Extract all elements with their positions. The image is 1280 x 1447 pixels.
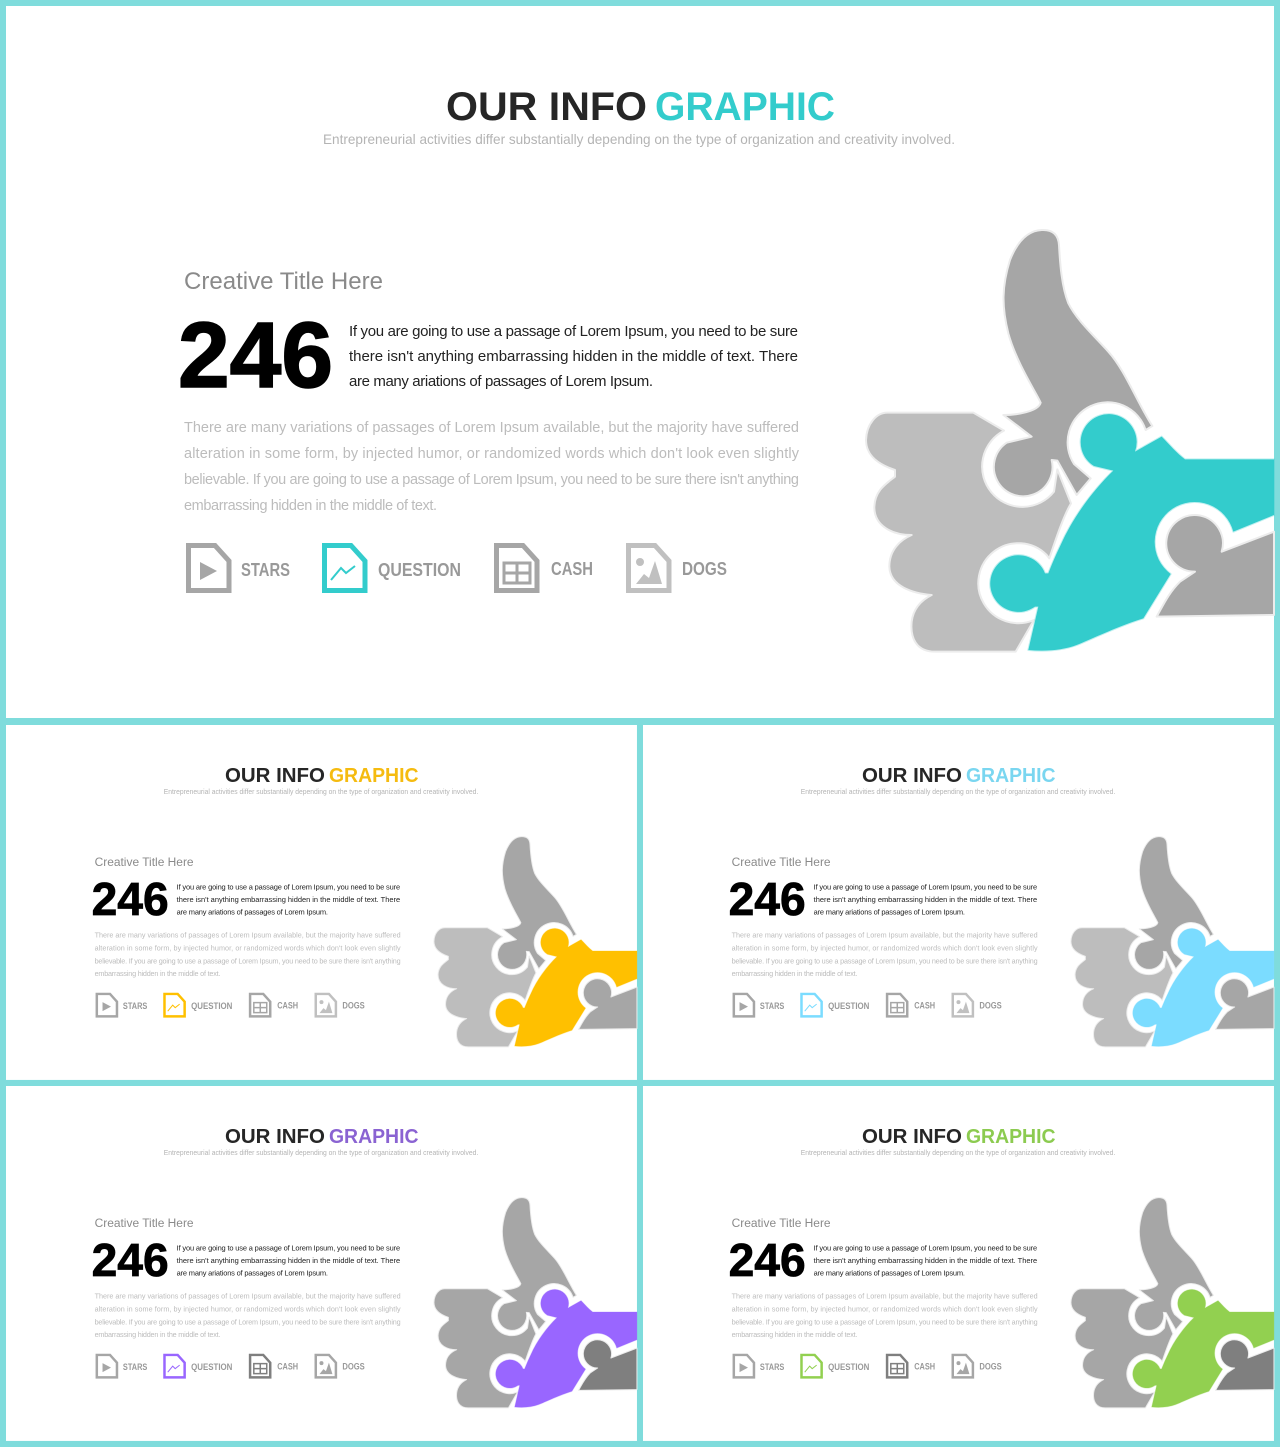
legend: cash: CASH	[914, 1001, 935, 1011]
heading: creative title: Creative Title Here	[95, 855, 194, 869]
text block: dark paragraph: are many ariations of passages of Lorem Ipsum.	[349, 373, 653, 390]
text block: gray paragraph: alteration in some form, by injected humor, or randomized words which don't look even slightly	[184, 446, 800, 462]
text block: gray paragraph: believable. If you are going to use a passage of Lorem Ipsum, you need to be sure there isn't anything	[95, 956, 401, 965]
icon: puzzle thumbs up	[1071, 837, 1274, 1047]
legend: cash	[250, 1355, 298, 1377]
legend: dogs	[316, 1355, 365, 1377]
icon: puzzle thumbs up	[434, 1198, 637, 1408]
legend: question: QUESTION	[191, 1362, 232, 1372]
subtitle: Entrepreneurial activities differ substantially depending on the type of organization and creativity involved.	[323, 131, 955, 147]
text block: dark paragraph	[177, 1243, 400, 1277]
text block: dark paragraph	[814, 1243, 1037, 1277]
legend: dogs	[628, 546, 727, 590]
title	[862, 765, 1056, 787]
legend: stars	[734, 994, 784, 1016]
big number: 246	[92, 873, 169, 925]
icon: puzzle thumbs up	[1071, 1198, 1274, 1408]
text block: dark paragraph	[349, 323, 798, 390]
legend: cash: CASH	[277, 1001, 298, 1011]
text block: dark paragraph	[814, 882, 1037, 916]
title: OUR INFO	[862, 765, 962, 787]
text block: gray paragraph	[184, 420, 800, 514]
legend: stars: STARS	[760, 1362, 784, 1372]
panel: green slide	[643, 1086, 1274, 1441]
subtitle: Entrepreneurial activities differ substantially depending on the type of organization and creativity involved.	[801, 789, 1115, 796]
text block: gray paragraph: believable. If you are going to use a passage of Lorem Ipsum, you need to be sure there isn't anything	[732, 956, 1038, 965]
legend: stars	[97, 994, 147, 1016]
legend: cash: CASH	[551, 559, 593, 579]
big number: 246	[729, 873, 806, 925]
legend: dogs	[316, 994, 365, 1016]
legend: stars: STARS	[241, 560, 290, 580]
subtitle: Entrepreneurial activities differ substantially depending on the type of organization and creativity involved.	[164, 1150, 478, 1157]
text block: gray paragraph: alteration in some form, by injected humor, or randomized words which don't look even slightly	[732, 1304, 1038, 1313]
text block: dark paragraph: are many ariations of passages of Lorem Ipsum.	[814, 907, 965, 916]
heading: creative title: Creative Title Here	[95, 1216, 194, 1230]
icon: puzzle thumbs up	[866, 230, 1274, 652]
icon: puzzle thumbs up	[434, 837, 637, 1047]
big number: 246	[178, 303, 333, 407]
title: OUR INFO	[225, 765, 325, 787]
text block: dark paragraph: If you are going to use a passage of Lorem Ipsum, you need to be sure	[177, 1243, 400, 1253]
legend: question: QUESTION	[191, 1001, 232, 1011]
legend: cash	[250, 994, 298, 1016]
text block: gray paragraph: embarrassing hidden in the middle of text.	[95, 969, 220, 978]
legend: question	[164, 1355, 232, 1377]
text block: gray paragraph: embarrassing hidden in the middle of text.	[184, 498, 437, 514]
text block: dark paragraph: If you are going to use a passage of Lorem Ipsum, you need to be sure	[349, 323, 798, 340]
legend: dogs	[953, 994, 1002, 1016]
legend: question	[164, 994, 232, 1016]
text block: dark paragraph: are many ariations of passages of Lorem Ipsum.	[814, 1268, 965, 1277]
legend: cash: CASH	[914, 1362, 935, 1372]
legend: dogs: DOGS	[682, 559, 727, 579]
legend: stars	[188, 546, 290, 590]
text block: gray paragraph: embarrassing hidden in the middle of text.	[732, 1330, 857, 1339]
text block: dark paragraph	[177, 882, 400, 916]
text block: gray paragraph: embarrassing hidden in the middle of text.	[732, 969, 857, 978]
text block: gray paragraph	[732, 1291, 1038, 1339]
text block: gray paragraph: There are many variations of passages of Lorem Ipsum available, but the majority have suffered	[95, 1291, 401, 1300]
text block: dark paragraph: If you are going to use a passage of Lorem Ipsum, you need to be sure	[814, 882, 1037, 892]
heading: creative title: Creative Title Here	[184, 268, 383, 295]
text block: gray paragraph: alteration in some form, by injected humor, or randomized words which don't look even slightly	[95, 1304, 401, 1313]
text block: dark paragraph: If you are going to use a passage of Lorem Ipsum, you need to be sure	[177, 882, 400, 892]
title	[225, 1126, 419, 1148]
text block: dark paragraph: there isn't anything embarrassing hidden in the middle of text. There	[814, 895, 1037, 904]
legend: stars: STARS	[760, 1001, 784, 1011]
text block: dark paragraph: there isn't anything embarrassing hidden in the middle of text. There	[177, 895, 400, 904]
legend: cash	[496, 546, 593, 590]
legend: question	[324, 546, 461, 590]
legend: cash: CASH	[277, 1362, 298, 1372]
text block: dark paragraph: are many ariations of passages of Lorem Ipsum.	[177, 907, 328, 916]
legend: dogs: DOGS	[979, 1362, 1002, 1372]
text block: gray paragraph: believable. If you are going to use a passage of Lorem Ipsum, you need to be sure there isn't anything	[184, 472, 799, 488]
legend: dogs	[953, 1355, 1002, 1377]
panel: large teal slide	[6, 6, 1274, 718]
text block: gray paragraph: alteration in some form, by injected humor, or randomized words which don't look even slightly	[95, 943, 401, 952]
text block: gray paragraph: believable. If you are going to use a passage of Lorem Ipsum, you need to be sure there isn't anything	[95, 1317, 401, 1326]
panel: purple slide	[6, 1086, 637, 1441]
subtitle: Entrepreneurial activities differ substantially depending on the type of organization and creativity involved.	[164, 789, 478, 796]
text block: dark paragraph: there isn't anything embarrassing hidden in the middle of text. There	[814, 1256, 1037, 1265]
legend: cash	[887, 994, 935, 1016]
title	[225, 765, 419, 787]
title	[446, 85, 835, 129]
title: GRAPHIC	[966, 765, 1056, 787]
text block: gray paragraph	[95, 930, 401, 978]
text block: dark paragraph: are many ariations of passages of Lorem Ipsum.	[177, 1268, 328, 1277]
title: OUR INFO	[446, 85, 647, 129]
text block: dark paragraph: If you are going to use a passage of Lorem Ipsum, you need to be sure	[814, 1243, 1037, 1253]
heading: creative title: Creative Title Here	[732, 1216, 831, 1230]
legend: stars	[734, 1355, 784, 1377]
text block: dark paragraph: there isn't anything embarrassing hidden in the middle of text. There	[349, 348, 798, 365]
text block: gray paragraph: There are many variations of passages of Lorem Ipsum available, but the majority have suffered	[184, 420, 799, 436]
text block: gray paragraph	[732, 930, 1038, 978]
legend: stars	[97, 1355, 147, 1377]
title	[862, 1126, 1056, 1148]
legend: question	[801, 1355, 869, 1377]
title: GRAPHIC	[966, 1126, 1056, 1148]
big number: 246	[729, 1234, 806, 1286]
legend: stars: STARS	[123, 1001, 147, 1011]
text block: gray paragraph: believable. If you are going to use a passage of Lorem Ipsum, you need to be sure there isn't anything	[732, 1317, 1038, 1326]
legend: question: QUESTION	[828, 1001, 869, 1011]
big number: 246	[92, 1234, 169, 1286]
legend: dogs: DOGS	[342, 1362, 365, 1372]
title: OUR INFO	[862, 1126, 962, 1148]
text block: gray paragraph: There are many variations of passages of Lorem Ipsum available, but the majority have suffered	[95, 930, 401, 939]
panel: yellow slide	[6, 725, 637, 1080]
title: GRAPHIC	[329, 1126, 419, 1148]
text block: gray paragraph	[95, 1291, 401, 1339]
legend: dogs: DOGS	[979, 1001, 1002, 1011]
legend: question	[801, 994, 869, 1016]
subtitle: Entrepreneurial activities differ substantially depending on the type of organization and creativity involved.	[801, 1150, 1115, 1157]
text block: gray paragraph: alteration in some form, by injected humor, or randomized words which don't look even slightly	[732, 943, 1038, 952]
legend: cash	[887, 1355, 935, 1377]
title: GRAPHIC	[655, 85, 835, 129]
panel: light blue slide	[643, 725, 1274, 1080]
text block: gray paragraph: There are many variations of passages of Lorem Ipsum available, but the majority have suffered	[732, 930, 1038, 939]
heading: creative title: Creative Title Here	[732, 855, 831, 869]
text block: gray paragraph: There are many variations of passages of Lorem Ipsum available, but the majority have suffered	[732, 1291, 1038, 1300]
title: GRAPHIC	[329, 765, 419, 787]
legend: stars: STARS	[123, 1362, 147, 1372]
text block: gray paragraph: embarrassing hidden in the middle of text.	[95, 1330, 220, 1339]
legend: question: QUESTION	[828, 1362, 869, 1372]
title: OUR INFO	[225, 1126, 325, 1148]
legend: dogs: DOGS	[342, 1001, 365, 1011]
text block: dark paragraph: there isn't anything embarrassing hidden in the middle of text. There	[177, 1256, 400, 1265]
legend: question: QUESTION	[378, 560, 461, 580]
